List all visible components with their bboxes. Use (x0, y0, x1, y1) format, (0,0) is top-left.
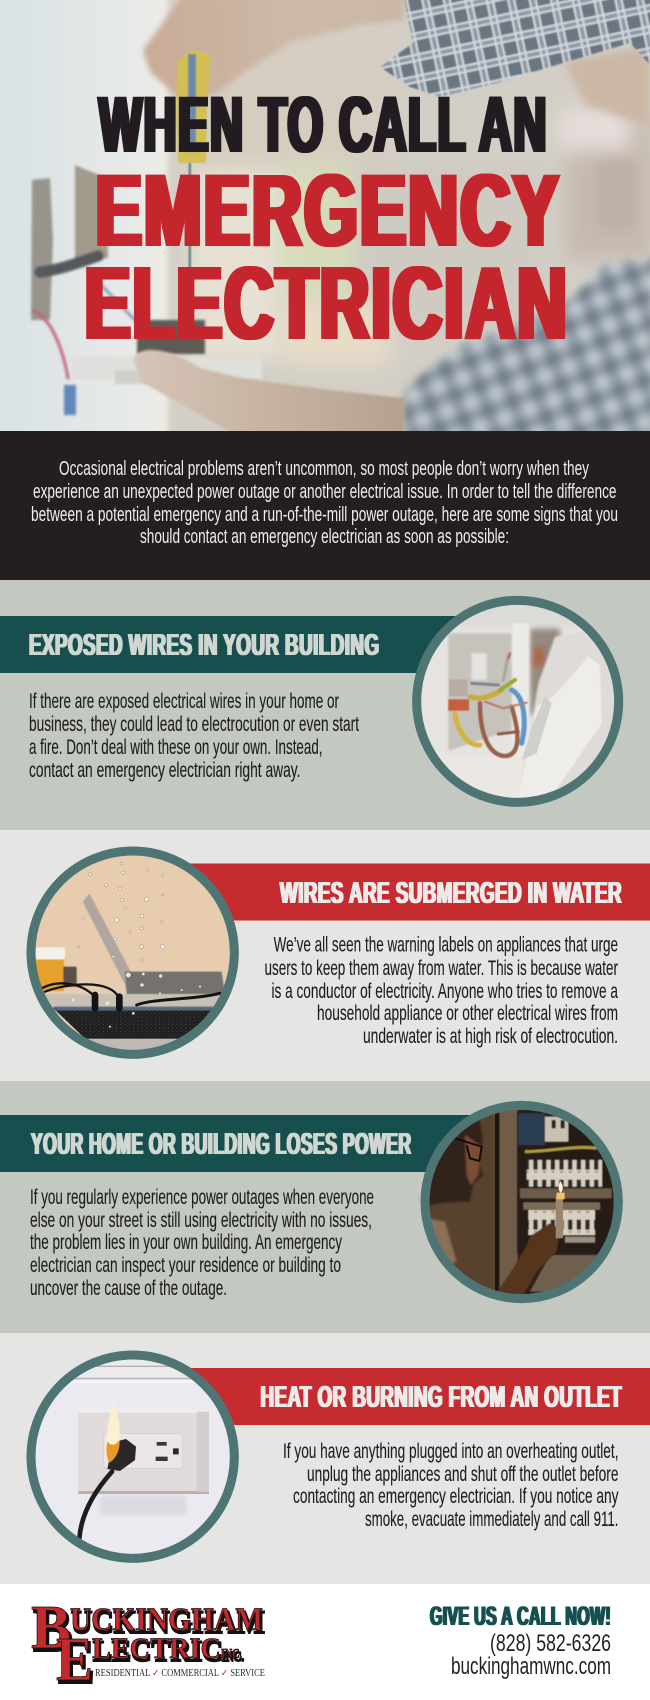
electrical box and wall hole (31, 165, 108, 320)
device in the lower hand (72, 320, 262, 384)
panel: power loss (0, 1081, 650, 1333)
logo shadow (33, 1597, 265, 1697)
body text: electrician can inspect your residence or building to (30, 1254, 341, 1277)
top plaid sleeve (380, 0, 650, 97)
body text: contact an emergency electrician right away. (29, 759, 300, 782)
logo lettering: INC. (221, 1647, 242, 1662)
body text (30, 1186, 374, 1300)
hero photo: electrician working on an outlet (0, 0, 650, 440)
eyeglasses (455, 1138, 482, 1161)
logo shadow: E (58, 1629, 95, 1697)
plug (107, 1439, 136, 1471)
panel: submerged wires (0, 830, 650, 1081)
switch plate (518, 657, 602, 797)
logo lettering: UCKINGHAM (70, 1602, 263, 1638)
logo lettering: E (56, 1626, 93, 1694)
bottom plaid shirt (403, 258, 650, 440)
photo: laptop and power strip in water (26, 846, 239, 1059)
heading bar (0, 1115, 475, 1172)
title (85, 80, 569, 360)
power strip (53, 1008, 217, 1040)
body text: If you regularly experience power outages when everyone (30, 1186, 374, 1209)
upper hand holding screwdriver (143, 0, 404, 95)
contact details: (828) 582-6326 (490, 1630, 611, 1657)
laptop (83, 893, 225, 995)
logo shadow: B (33, 1597, 73, 1665)
screwdriver (176, 50, 212, 267)
window frame, far background (599, 159, 632, 224)
logo shadow: LECTRIC (93, 1635, 223, 1668)
panel: exposed wires (0, 580, 650, 830)
contact details (430, 1601, 611, 1680)
photo: exposed wires in wall socket (412, 596, 624, 807)
connector (448, 699, 469, 711)
flame (106, 1402, 120, 1462)
power cord (79, 1472, 112, 1538)
body text: business, they could lead to electrocution or even start (29, 713, 359, 736)
footer (0, 1584, 650, 1700)
logo shadow: INC. (222, 1650, 244, 1665)
logo lettering: LECTRIC (92, 1632, 221, 1665)
water drops (77, 862, 165, 961)
panel: burning outlet (0, 1333, 650, 1584)
socket (103, 1434, 183, 1468)
blurred room background (192, 108, 650, 368)
coffee cup (33, 947, 77, 991)
photo: man with a candle at breaker panel (420, 1100, 623, 1304)
logo tagline: RESIDENTIAL ✓ COMMERCIAL ✓ SERVICE (95, 1668, 265, 1679)
logo lettering (31, 1594, 263, 1694)
wires (455, 653, 527, 756)
company logo (31, 1594, 265, 1697)
body text: else on your street is still using electricity with no issues, (30, 1209, 372, 1232)
heading bar (0, 616, 470, 673)
table surface (45, 994, 220, 1008)
body text (29, 690, 359, 782)
man's face and shoulder (430, 1120, 484, 1264)
body text: If there are exposed electrical wires in your home or (29, 690, 339, 713)
logo shadow: UCKINGHAM (71, 1605, 265, 1641)
heading: EXPOSED WIRES IN YOUR BUILDING (29, 628, 380, 662)
wall plate (78, 1412, 196, 1491)
cords (42, 983, 220, 1008)
body text (283, 1440, 619, 1531)
wall on the left (0, 0, 168, 440)
cables (34, 256, 140, 415)
intro band (0, 431, 650, 580)
body text: a fire. Don’t deal with these on your own. Instead, (29, 736, 322, 759)
hand holding candle (495, 1223, 560, 1295)
logo lettering: B (31, 1594, 71, 1662)
photo: burning plug in wall outlet (26, 1350, 239, 1563)
heading bar (185, 1368, 650, 1425)
forearm (564, 46, 650, 128)
intro text (31, 458, 618, 548)
body text: uncover the cause of the outage. (30, 1277, 227, 1300)
heading bar (185, 864, 650, 920)
breaker panel (517, 1112, 612, 1292)
body text: the problem lies in your own building. An emergency (30, 1231, 342, 1254)
candle and flame (556, 1181, 565, 1238)
soft shadow under plate (100, 1495, 187, 1515)
body text (264, 934, 618, 1048)
lower hand (134, 350, 404, 433)
